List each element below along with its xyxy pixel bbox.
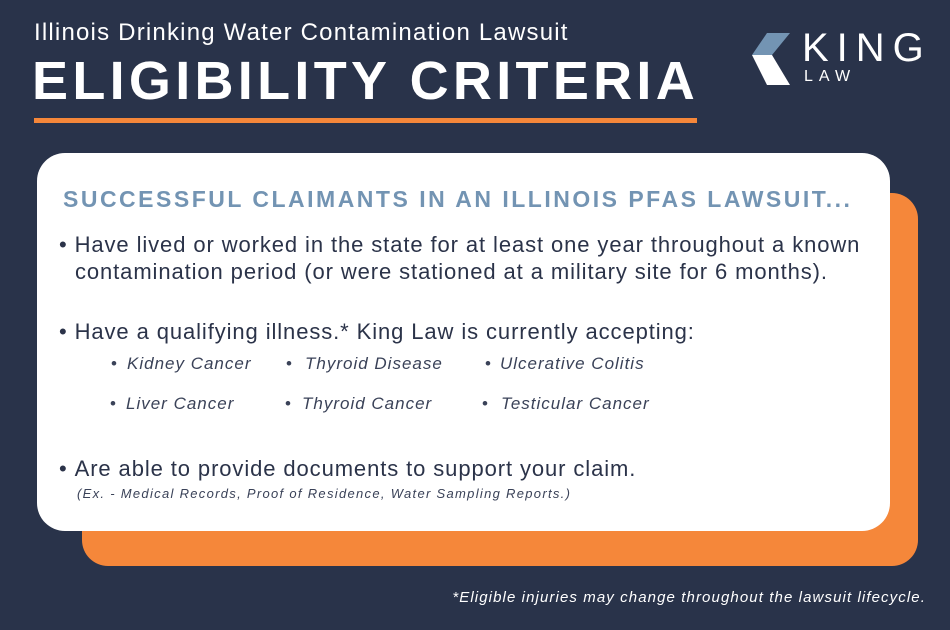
illness list: Testicular Cancer <box>501 394 650 413</box>
orange back card <box>82 193 918 566</box>
footnote: *Eligible injuries may change throughout the lawsuit lifecycle. <box>452 589 926 606</box>
bullet 1: contamination period (or were stationed at a military site for 6 months). <box>75 259 828 284</box>
logo <box>752 26 932 85</box>
bullet 2: • Have a qualifying illness.* King Law is currently accepting: <box>59 319 695 344</box>
illness list <box>110 354 650 413</box>
bullet 3: • Are able to provide documents to support your claim. <box>59 456 636 481</box>
bullet 1: • Have lived or worked in the state for at least one year throughout a known <box>59 232 860 257</box>
illness list: • <box>485 354 491 373</box>
illness list: • <box>285 394 291 413</box>
example note: (Ex. - Medical Records, Proof of Residence, Water Sampling Reports.) <box>77 486 571 501</box>
title underline <box>34 118 697 123</box>
illness list: • <box>286 354 292 373</box>
illness list: • <box>110 394 116 413</box>
illness list: Thyroid Disease <box>305 354 443 373</box>
bullet 1 <box>59 232 860 284</box>
card heading: SUCCESSFUL CLAIMANTS IN AN ILLINOIS PFAS LAWSUIT... <box>63 186 852 212</box>
logo: KING <box>802 26 932 70</box>
logo: LAW <box>804 68 856 85</box>
illness list: Thyroid Cancer <box>302 394 432 413</box>
illness list: • <box>111 354 117 373</box>
illness list: Liver Cancer <box>126 394 234 413</box>
title: ELIGIBILITY CRITERIA <box>32 51 699 111</box>
subtitle: Illinois Drinking Water Contamination Lawsuit <box>34 19 569 46</box>
illness list: Kidney Cancer <box>127 354 252 373</box>
illness list: Ulcerative Colitis <box>500 354 645 373</box>
white card <box>37 153 890 531</box>
illness list: • <box>482 394 488 413</box>
